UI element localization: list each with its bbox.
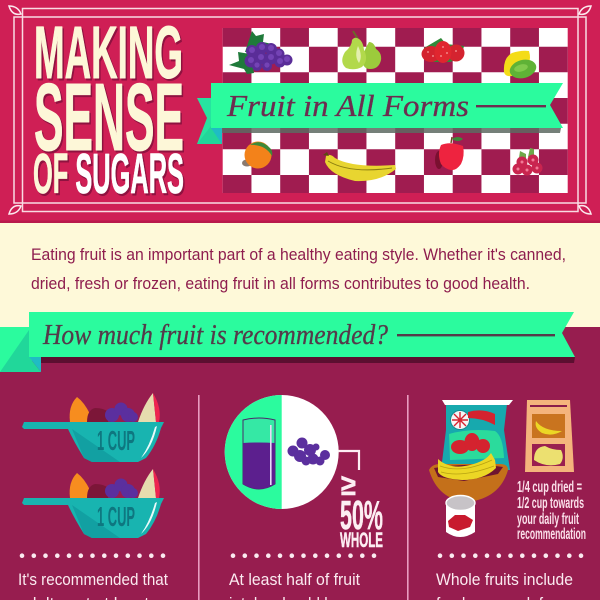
dried fruit note [517,479,586,543]
50% whole label: WHOLE [340,529,383,552]
icon: canned fruit [446,496,475,537]
panel: header [0,0,600,223]
icon: frozen fruit bag [441,400,513,470]
banner: Fruit in All Forms: Fruit in All Forms [226,88,469,123]
icon: cup with fruit: 1 CUP [97,425,135,456]
icon: lemon and lime [504,51,538,81]
panel: column 3 fruit forms [429,400,586,543]
banner: How much fruit is recommended?: How much fruit is recommended? [42,319,388,351]
title: OF SUGARS [33,142,184,206]
column text: Whole fruits include [436,571,573,589]
column text [18,571,582,600]
column text: At least half of fruit [229,571,360,589]
icon: second cup with fruit [22,469,164,538]
icon: banana [323,152,396,181]
divider lines [198,395,409,600]
icon: dried fruit box [525,400,574,472]
title: MAKING [34,11,183,94]
banner: How much fruit is recommended? [0,312,575,372]
dotted separators [20,553,583,558]
icon: orange [242,142,272,168]
50% whole label [340,469,383,552]
50% whole label: 50% [340,492,383,538]
intro text: Eating fruit is an important part of a healthy eating style. Whether it's canned, [31,246,566,264]
title [33,11,186,208]
50% whole label: ≥ [341,469,356,502]
icon: grapes [229,31,292,74]
checkerboard tablecloth [223,28,568,193]
icon: fruit bowl with bananas [429,453,508,502]
intro text [31,246,566,293]
panel: intro [0,223,600,600]
icon: second cup with fruit: 1 CUP [97,501,135,532]
icon: cup with fruit [22,393,164,462]
column text: It's recommended that [18,571,168,589]
icon: raspberries [512,148,542,176]
intro text: dried, fresh or frozen, eating fruit in all forms contributes to good health. [31,275,530,293]
decorative frame [14,8,586,212]
banner: Fruit in All Forms [197,83,563,144]
pie: half juice half whole [225,395,339,509]
bracket [338,451,359,470]
panel: header: MAKING [36,13,184,96]
icon: strawberries [422,38,464,63]
icon: apple [435,137,464,170]
panel: column 1 cups [22,393,164,538]
panel: column 2 half whole chart [225,395,383,552]
panel: header: OF SUGARS [34,144,186,208]
panel: header: SENSE [34,64,184,171]
icon: juice glass [243,418,275,489]
panel: header: SENSE [36,66,186,173]
icon: grape cluster [288,438,330,466]
icon: corner leaves [9,6,591,214]
icon: pears [342,31,381,69]
